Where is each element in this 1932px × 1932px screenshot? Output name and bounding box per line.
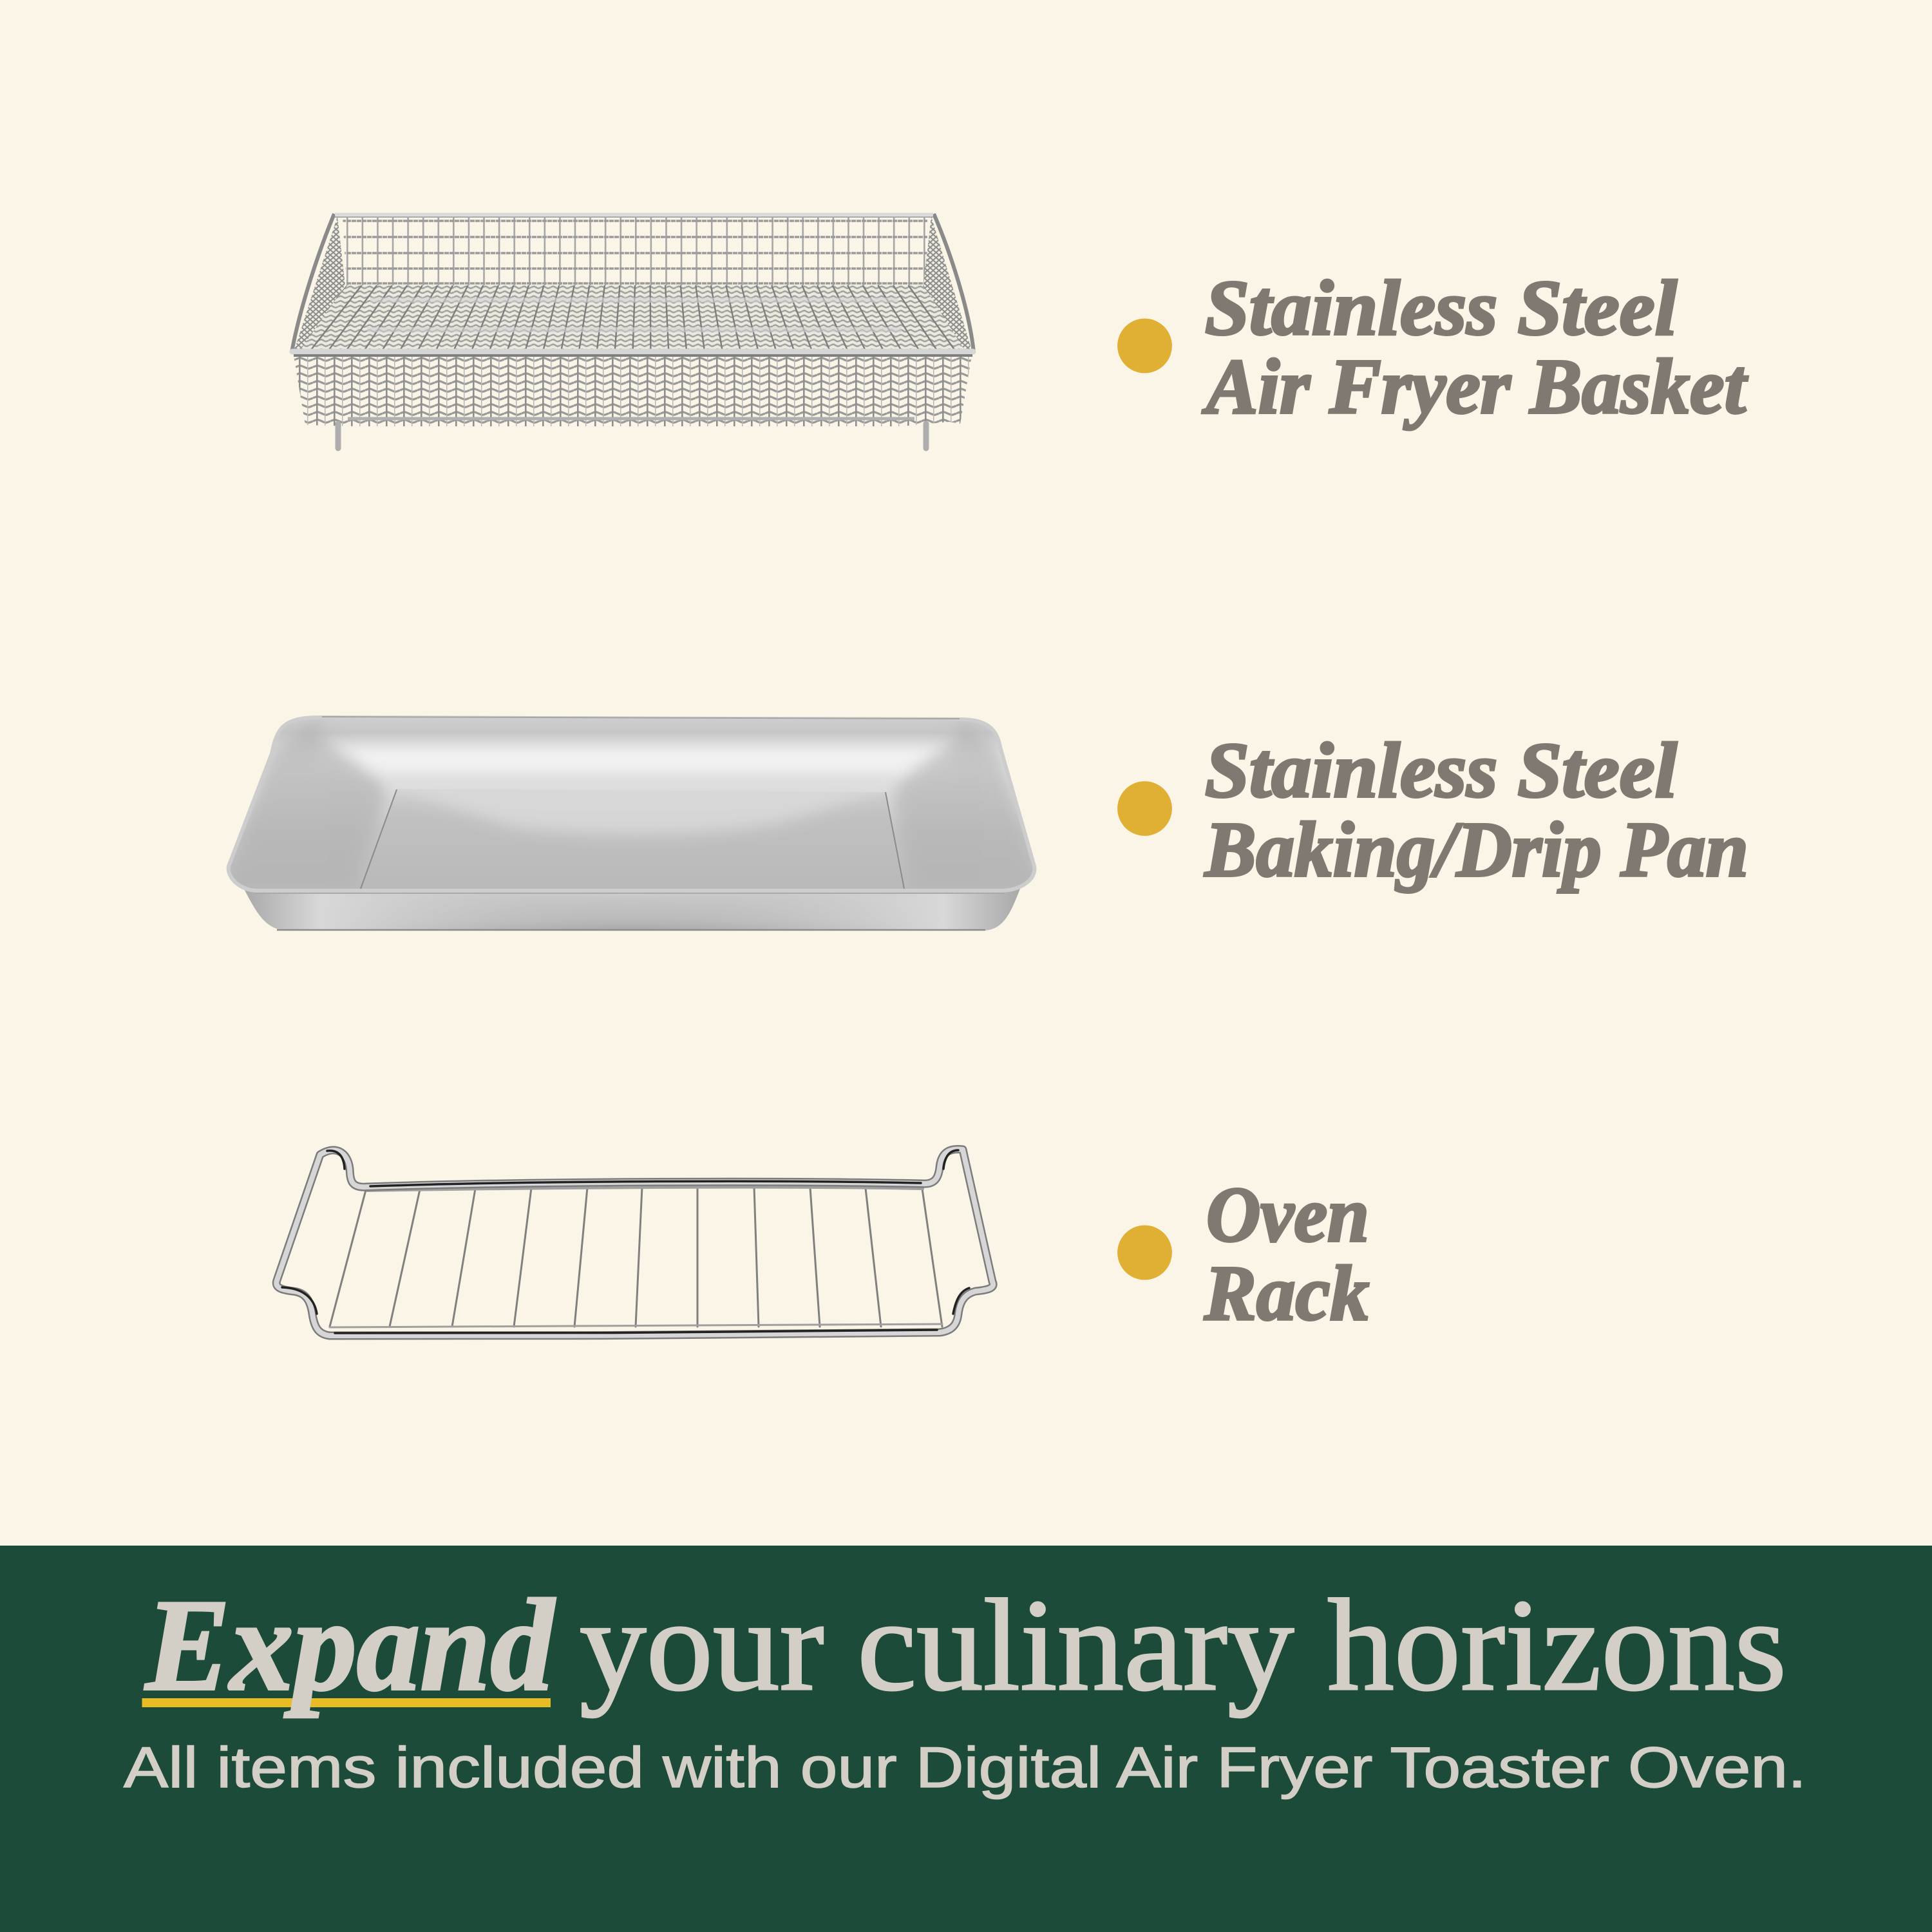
headline: Expand — [144, 1573, 556, 1718]
label: Stainless Steel Air Fryer Basket — [1202, 265, 1748, 430]
rack rail shadows — [282, 1150, 969, 1333]
bullet dot 3 — [1117, 1226, 1172, 1280]
label: Oven Rack: Rack — [1204, 1250, 1369, 1337]
headline continuation: your culinary horizons — [580, 1573, 1786, 1718]
label: Stainless Steel Air Fryer Basket: Air Fryer Basket — [1202, 343, 1748, 430]
label: Oven Rack: Oven — [1206, 1171, 1369, 1258]
rack inner rails — [367, 1188, 923, 1191]
product image: stainless steel baking/drip pan — [219, 715, 1050, 931]
product image: oven rack — [276, 1150, 993, 1336]
pan interior — [219, 715, 1050, 895]
rack cross wires — [330, 1187, 942, 1327]
basket bottom frame — [348, 417, 914, 420]
label: Stainless Steel Baking/Drip Pan — [1204, 727, 1748, 893]
rack tube frame — [276, 1150, 993, 1336]
pan floor — [385, 789, 891, 832]
basket front wall mesh — [290, 355, 979, 428]
basket floor mesh — [290, 285, 979, 352]
label: Stainless Steel Baking/Drip Pan: Stainless Steel — [1205, 727, 1677, 814]
headline underline — [142, 1698, 551, 1707]
pan rim — [229, 717, 1034, 891]
bullet dot 2 — [1117, 781, 1172, 836]
label: Oven Rack — [1204, 1171, 1369, 1337]
subheading: All items included with our Digital Air Fryer Toaster Oven. — [124, 1735, 1806, 1799]
basket legs — [338, 424, 926, 448]
basket back wall mesh — [341, 216, 934, 285]
basket side walls — [294, 216, 345, 352]
pan front wall — [242, 886, 1021, 931]
label: Stainless Steel Air Fryer Basket: Stainless Steel — [1205, 265, 1677, 352]
bullet dot 1 — [1117, 319, 1172, 373]
basket rims — [292, 214, 334, 352]
label: Stainless Steel Baking/Drip Pan: Baking/Drip Pan — [1204, 806, 1748, 893]
product image: stainless steel air fryer basket — [290, 214, 979, 448]
panel: green footer banner — [0, 1546, 1932, 1932]
